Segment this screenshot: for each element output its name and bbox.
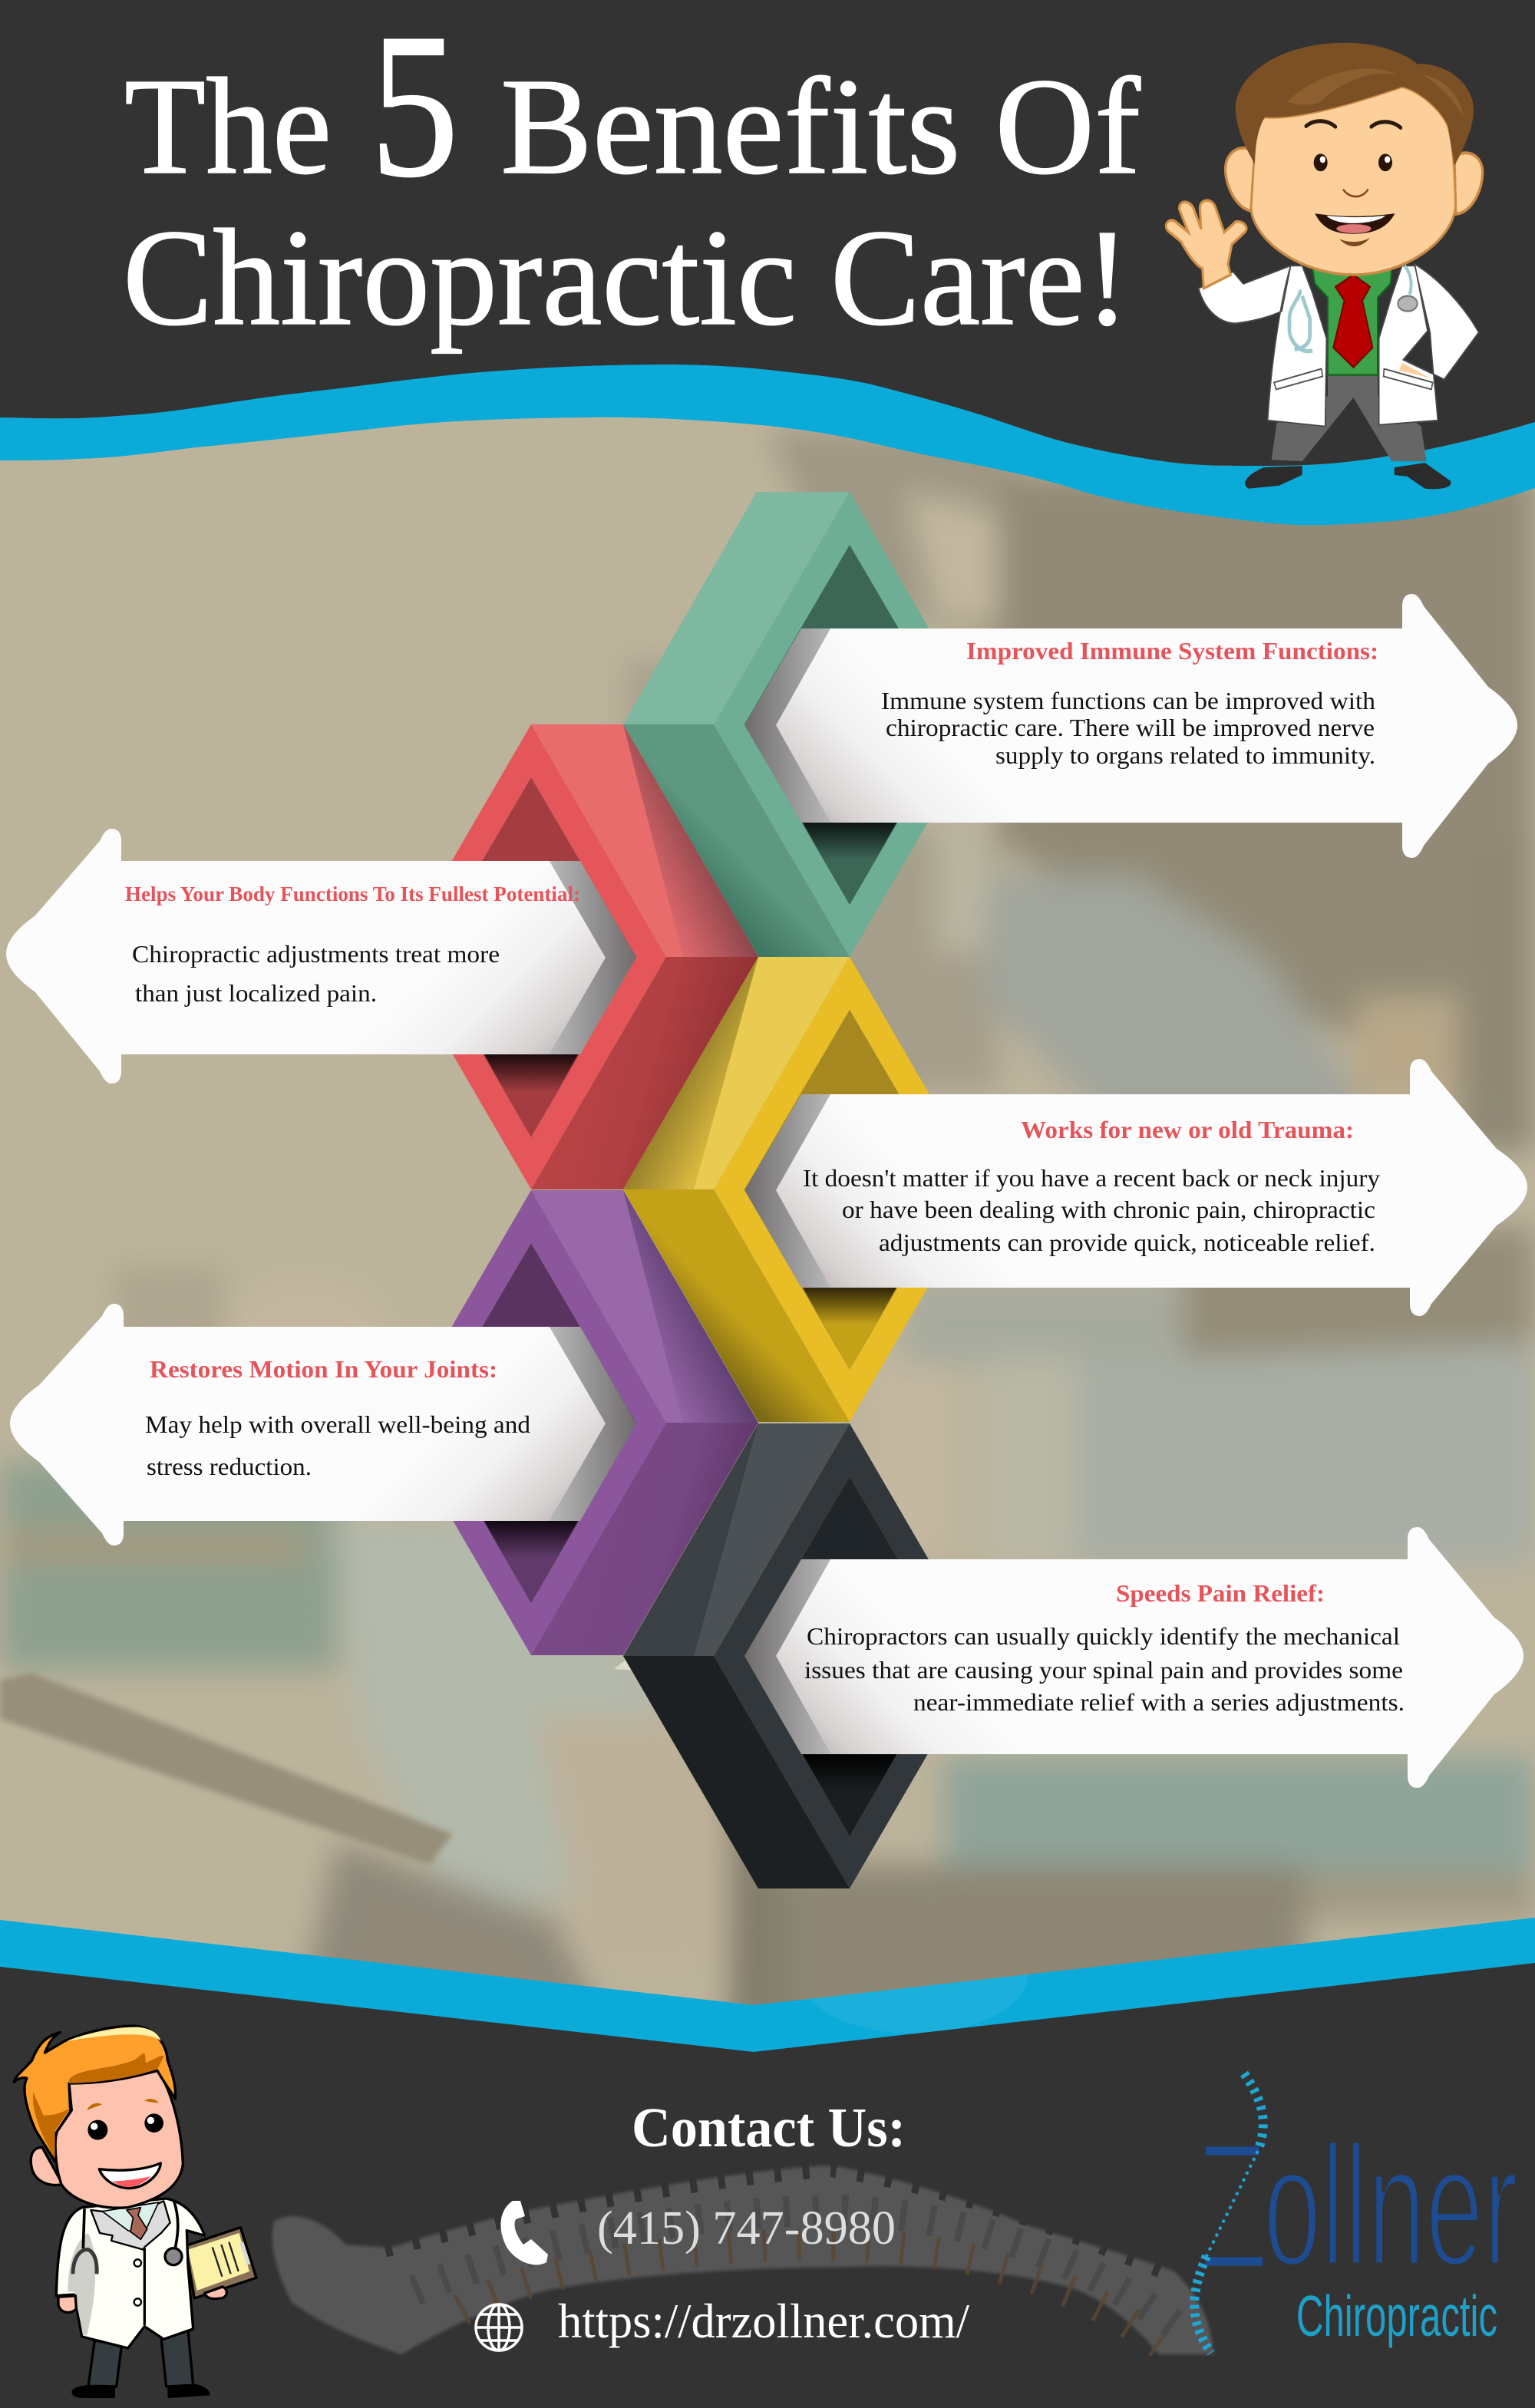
icon: phone — [500, 2201, 548, 2265]
collar — [91, 2201, 170, 2250]
banner arrow — [1028, 1059, 1527, 1316]
face — [1251, 87, 1456, 275]
body text: Chiropractors can usually quickly identify the mechanical — [807, 1622, 1400, 1650]
logo: Zollner Chiropractic — [1194, 2073, 1518, 2353]
waving hand — [1166, 200, 1246, 289]
body text: adjustments can provide quick, noticeable relief. — [879, 1229, 1375, 1256]
hand in pocket — [1399, 363, 1430, 378]
panel: benefit 3 trauma — [744, 1059, 1527, 1370]
banner body — [776, 1559, 1028, 1754]
heading: Restores Motion In Your Joints: — [150, 1355, 497, 1383]
smile — [99, 2163, 160, 2189]
hand on clipboard — [205, 2287, 226, 2299]
banner chevron — [744, 628, 830, 823]
mouth — [1315, 213, 1395, 234]
title: Chiropractic Care! — [123, 201, 1130, 354]
illustration: spine — [272, 2164, 1213, 2354]
heading: Improved Immune System Functions: — [966, 637, 1378, 665]
hole shadow — [484, 1054, 578, 1137]
banner body — [345, 1327, 606, 1521]
title: Benefits Of — [500, 50, 1141, 203]
body text: issues that are causing your spinal pain and provides some — [804, 1656, 1403, 1684]
phone number: (415) 747-8980 — [597, 2202, 896, 2255]
contact heading: Contact Us: — [632, 2096, 906, 2159]
doctor pants — [1272, 375, 1426, 461]
title: The — [124, 50, 332, 203]
doctor tie — [1333, 275, 1372, 368]
eyes — [87, 2113, 163, 2140]
icon: doctor with clipboard — [14, 2026, 256, 2396]
stethoscope — [73, 2201, 182, 2274]
ears — [1226, 148, 1483, 214]
hexagon: purple — [396, 1190, 758, 1655]
body text: than just localized pain. — [135, 979, 377, 1007]
hair — [14, 2026, 176, 2162]
logo spine dots — [1244, 2073, 1263, 2151]
panel: benefit 2 body functions — [6, 829, 636, 1137]
doctor coat — [56, 2199, 205, 2348]
banner body — [776, 1094, 1028, 1288]
banner chevron — [550, 1327, 636, 1521]
banner arrow — [1028, 594, 1517, 858]
heading: Helps Your Body Functions To Its Fullest Potential: — [125, 882, 580, 905]
hole shadow — [803, 1288, 896, 1370]
eyes — [1314, 153, 1392, 171]
body text: stress reduction. — [147, 1453, 312, 1480]
body text — [881, 687, 1375, 769]
hexagon: green — [623, 492, 985, 957]
hole shadow — [484, 1521, 578, 1603]
icon: globe — [476, 2304, 522, 2350]
body text: May help with overall well-being and — [145, 1410, 530, 1438]
stethoscope — [1289, 266, 1418, 351]
chin shadow — [1339, 238, 1370, 246]
body text: near-immediate relief with a series adjustments. — [913, 1688, 1405, 1716]
bottom blue chevron band — [0, 1918, 1535, 2052]
panel: benefit 4 joints — [10, 1304, 636, 1603]
top header background — [0, 0, 1535, 466]
body text: chiropractic care. There will be improved nerve — [886, 714, 1375, 741]
heading: Works for new or old Trauma: — [1021, 1116, 1354, 1143]
doctor shoes — [73, 2385, 209, 2396]
hair shade — [33, 2053, 163, 2159]
hexagon: dark — [623, 1423, 985, 1888]
banner chevron — [550, 861, 636, 1054]
left hand — [58, 2296, 76, 2313]
coat placket — [140, 2248, 148, 2325]
body text: It doesn't matter if you have a recent back or neck injury — [803, 1164, 1380, 1192]
title — [123, 0, 1141, 354]
banner body — [776, 628, 1028, 823]
clipboard — [186, 2228, 256, 2298]
band highlight — [810, 1974, 1028, 2034]
background photo: chiropractor treating patient — [0, 414, 1535, 2057]
hexagon: red — [396, 724, 758, 1189]
logo Z bars — [1206, 2151, 1263, 2261]
doctor legs — [88, 2330, 193, 2387]
heading: Speeds Pain Relief: — [1116, 1579, 1325, 1607]
body text — [804, 1622, 1405, 1716]
body text — [145, 1410, 530, 1480]
teeth — [1326, 216, 1385, 223]
shirt — [102, 2202, 159, 2235]
eyebrows — [87, 2099, 159, 2110]
panel: hexagon chain — [396, 492, 985, 1888]
banner arrow — [1028, 1527, 1523, 1788]
banner arrow — [6, 829, 345, 1084]
panel: benefit 5 pain relief — [744, 1527, 1523, 1836]
top blue wave — [0, 364, 1535, 525]
body text — [132, 940, 500, 1007]
banner chevron — [744, 1559, 830, 1754]
hole shadow — [803, 1754, 896, 1836]
tongue — [1336, 224, 1372, 233]
website url: https://drzollner.com/ — [558, 2294, 969, 2348]
body text: Chiropractic adjustments treat more — [132, 940, 500, 968]
hexagon: yellow — [623, 957, 985, 1422]
doctor pockets — [1274, 369, 1433, 389]
doctor shoes — [1245, 463, 1451, 489]
body text: supply to organs related to immunity. — [995, 741, 1375, 769]
eyebrows — [1306, 121, 1401, 127]
smile lip — [113, 2176, 151, 2187]
doctor shirt — [1312, 269, 1391, 375]
bottom footer background — [0, 1961, 1535, 2408]
panel: benefit 1 immune system — [744, 594, 1517, 905]
buttons — [134, 2259, 141, 2306]
banner chevron — [744, 1094, 830, 1288]
coat shadow — [68, 2233, 95, 2335]
head — [55, 2070, 183, 2208]
body text — [803, 1164, 1380, 1256]
hair — [1236, 43, 1474, 166]
body text: Immune system functions can be improved with — [881, 687, 1375, 714]
doctor coat — [1199, 264, 1479, 427]
ear — [31, 2147, 63, 2185]
banner arrow — [10, 1304, 345, 1545]
body text: or have been dealing with chronic pain, chiropractic — [842, 1196, 1375, 1223]
nose — [1343, 190, 1368, 196]
icon: waving doctor mascot — [1166, 43, 1483, 489]
hole shadow — [803, 823, 896, 905]
tie — [127, 2208, 147, 2239]
hair highlight — [1287, 68, 1464, 117]
banner body — [345, 861, 606, 1054]
hair highlight — [67, 2027, 161, 2041]
